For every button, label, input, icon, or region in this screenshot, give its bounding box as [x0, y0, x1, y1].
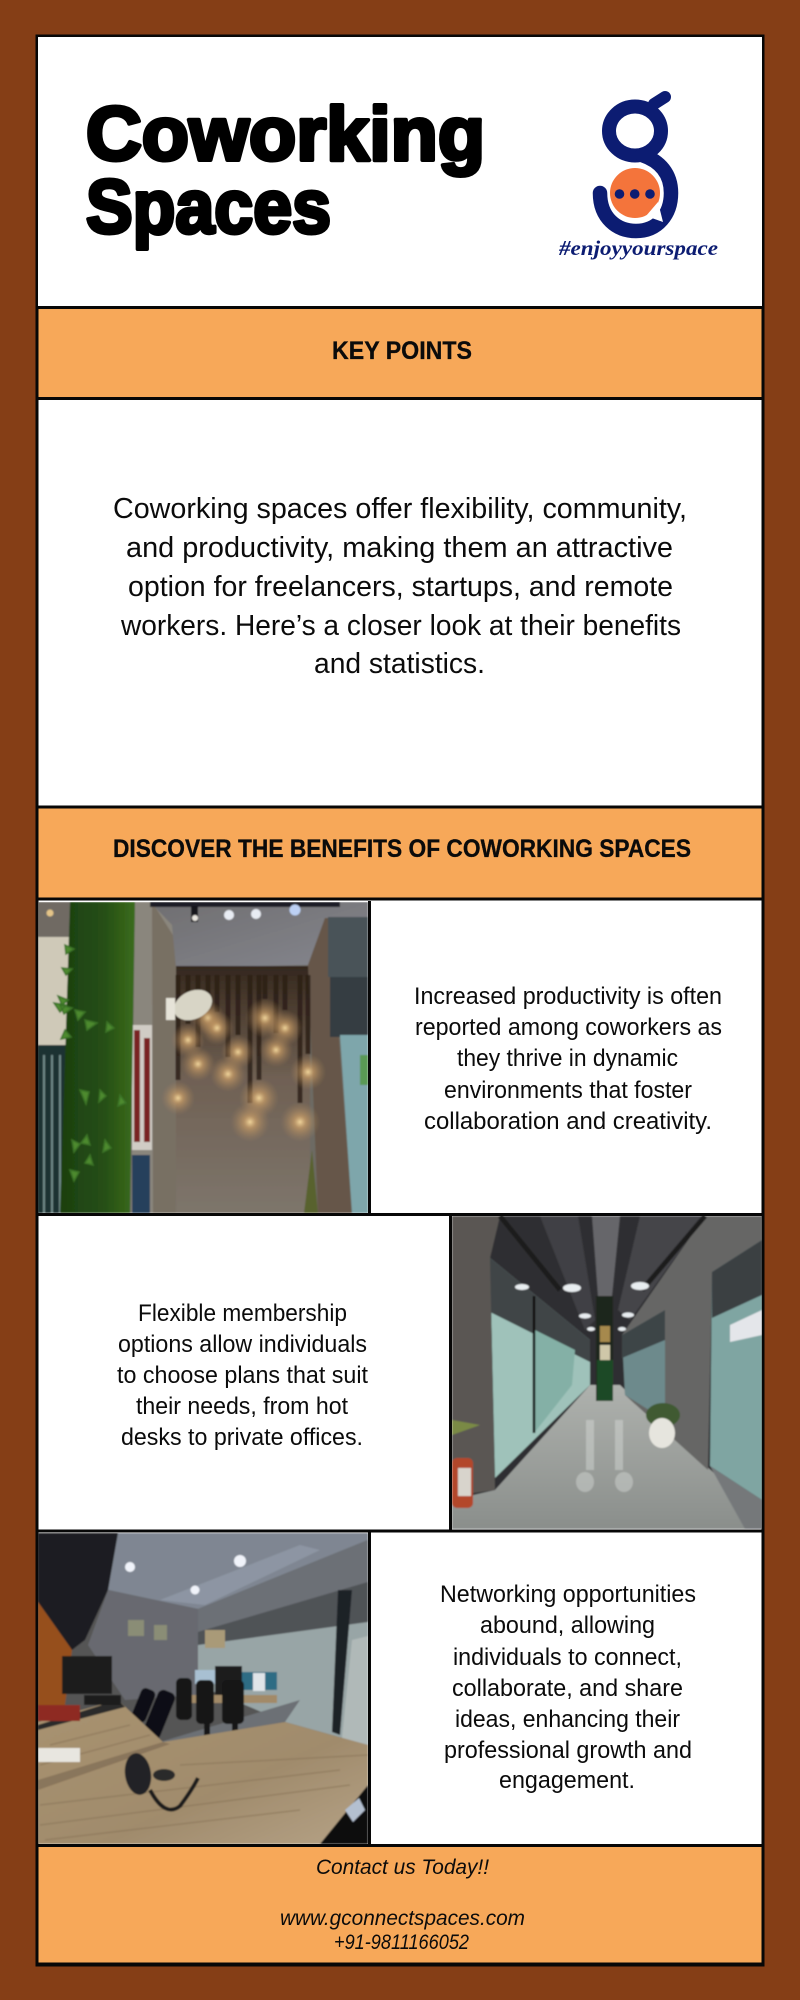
text block: introduction: [113, 493, 687, 680]
text block: networking opportunities: engagement.: [499, 1767, 635, 1794]
heading band: discover the benefits: [37, 807, 763, 899]
text block: flexible membership: [117, 1300, 368, 1451]
row 2 divider: [449, 1215, 452, 1530]
text block: networking opportunities: ideas, enhancing their: [455, 1706, 680, 1733]
panel: contact band: +91-9811166052: [334, 1931, 469, 1954]
heading band: key points: KEY POINTS: [332, 337, 472, 365]
text block: increased productivity: collaboration and creativity.: [424, 1108, 712, 1135]
text block: networking opportunities: [440, 1581, 696, 1794]
panel: contact band: [37, 1846, 763, 1964]
text block: increased productivity: reported among coworkers as: [415, 1014, 722, 1041]
title: Spaces: [86, 165, 331, 250]
text block: introduction: Coworking spaces offer flexibility, community,: [113, 493, 687, 525]
title: Coworking: [86, 92, 485, 177]
heading band: discover the benefits: DISCOVER THE BENEFITS OF COWORKING SPACES: [113, 835, 691, 863]
text block: flexible membership: desks to private offices.: [121, 1424, 363, 1451]
panel: title header: [38, 37, 762, 306]
text block: flexible membership: options allow individuals: [118, 1331, 367, 1358]
row 2: photo of corridor with glass offices: [452, 1216, 762, 1529]
text block: introduction: option for freelancers, startups, and remote: [128, 571, 673, 603]
text block: increased productivity: they thrive in dynamic: [457, 1045, 678, 1072]
text block: introduction: and productivity, making them an attractive: [126, 532, 673, 564]
text block: introduction: and statistics.: [314, 648, 485, 680]
text block: flexible membership: Flexible membership: [138, 1300, 347, 1327]
panel: contact band: Contact us Today!!: [316, 1856, 489, 1879]
row 3 divider: [368, 1532, 371, 1845]
icon: gconnect logo: #enjoyyourspace: [558, 236, 718, 260]
text block: increased productivity: [414, 983, 722, 1135]
text block: networking opportunities: abound, allowing: [480, 1612, 655, 1639]
row 1 divider: [368, 901, 371, 1214]
text block: networking opportunities: Networking opportunities: [440, 1581, 696, 1608]
row 3: photo of office desks: [38, 1533, 368, 1844]
text block: networking opportunities: individuals to connect,: [453, 1644, 682, 1671]
row 1: photo of lit wall with green column: [38, 902, 368, 1213]
text block: flexible membership: to choose plans that suit: [117, 1362, 368, 1389]
heading band: key points: [37, 308, 763, 398]
icon: gconnect logo: [558, 97, 718, 260]
text block: networking opportunities: collaborate, and share: [452, 1675, 683, 1702]
text block: introduction: workers. Here’s a closer look at their benefits: [120, 610, 681, 642]
panel: contact band: www.gconnectspaces.com: [280, 1907, 525, 1930]
text block: networking opportunities: professional growth and: [444, 1737, 692, 1764]
title: [86, 92, 485, 250]
text block: increased productivity: environments that foster: [444, 1077, 692, 1104]
text block: flexible membership: their needs, from hot: [136, 1393, 348, 1420]
text block: increased productivity: Increased productivity is often: [414, 983, 722, 1010]
